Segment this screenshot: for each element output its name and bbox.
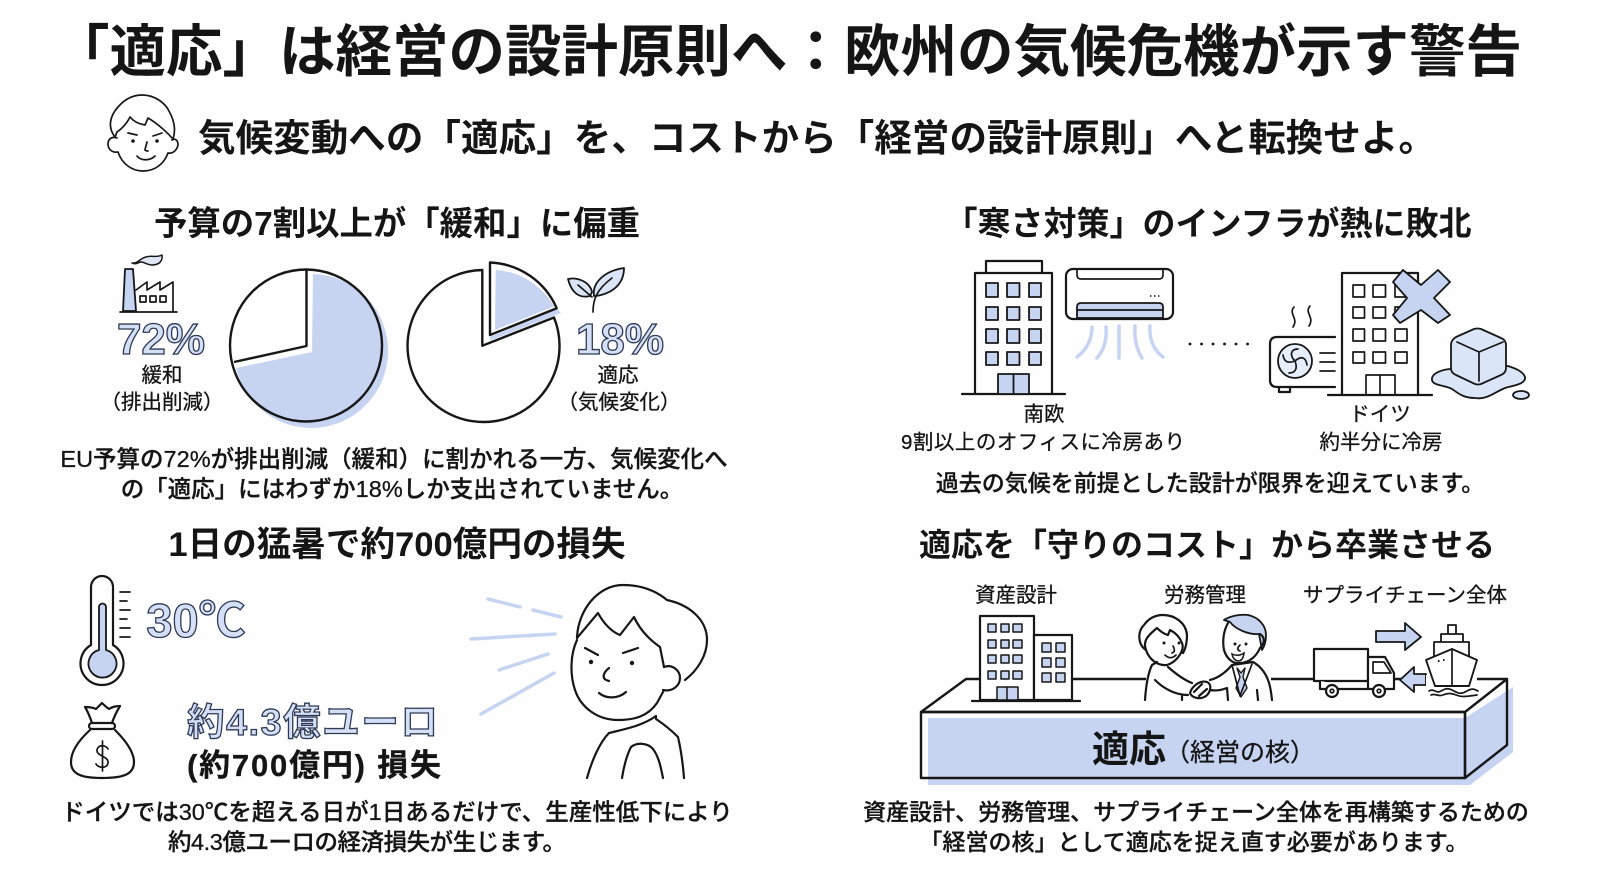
- label: asset design: 資産設計: [975, 584, 1057, 607]
- icon: person: [571, 585, 707, 778]
- icon: handshake people: [1139, 615, 1272, 702]
- title: 「適応」は経営の設計原則へ：欧州の気候危機が示す警告: [53, 20, 1522, 83]
- icon: air conditioner: [1066, 269, 1173, 358]
- icon: thermometer: [80, 576, 130, 685]
- panel: budget bias: [60, 205, 728, 502]
- heading: infrastructure: 「寒さ対策」のインフラが熱に敗北: [944, 205, 1472, 242]
- text: core body: 「経営の核」として適応を捉え直す必要があります。: [919, 829, 1469, 855]
- stat: 30 degrees: 30℃: [146, 594, 246, 647]
- text: infrastructure body: 過去の気候を前提とした設計が限界を迎えています。: [936, 470, 1484, 496]
- label: supply chain: サプライチェーン全体: [1303, 584, 1507, 607]
- text: heat body: [61, 799, 733, 855]
- stat: yen loss: (約700億円) 損失: [187, 748, 441, 783]
- icon: truck: [1314, 649, 1394, 697]
- icon: ship: [1426, 625, 1478, 696]
- text: budget body: [60, 446, 728, 502]
- icon: outdoor unit: [1270, 306, 1335, 392]
- heading: core: 適応を「守りのコスト」から卒業させる: [919, 527, 1495, 563]
- subtitle: 気候変動への「適応」を、コストから「経営の設計原則」へと転換せよ。: [198, 117, 1436, 159]
- icon: leaf: [568, 268, 624, 312]
- icon: office buildings: [972, 616, 1080, 701]
- text: core body: 資産設計、労務管理、サプライチェーン全体を再構築するための: [863, 799, 1529, 825]
- text: heat body: ドイツでは30℃を超える日が1日あるだけで、生産性低下により: [61, 799, 733, 825]
- icon: south europe building: [962, 261, 1065, 394]
- arrow: inbound: [1400, 667, 1426, 692]
- pie chart: 72 percent: [230, 270, 388, 428]
- label: core of management: （経営の核）: [1165, 739, 1315, 767]
- heading: heat loss: 1日の猛暑で約700億円の損失: [168, 526, 626, 564]
- heading: budget: 予算の7割以上が「緩和」に偏重: [154, 205, 640, 243]
- text: heat body: 約4.3億ユーロの経済損失が生じます。: [168, 829, 566, 855]
- label: adaptation: 適応: [598, 364, 638, 387]
- label: adaptation sub: （気候変化）: [558, 391, 680, 414]
- icon: cross mark: [1393, 270, 1450, 323]
- label: germany: [1320, 403, 1442, 454]
- label: south europe: 9割以上のオフィスに冷房あり: [901, 431, 1185, 454]
- icon: money bag: [71, 703, 134, 778]
- panel: cold infrastructure: [901, 205, 1529, 496]
- label: south europe: [901, 403, 1185, 454]
- stat: 18%: 18%: [576, 315, 664, 364]
- label: mitigation sub: （排出削減）: [100, 391, 224, 414]
- icon: germany building: [1328, 273, 1432, 395]
- pie chart: 18 percent: [408, 262, 561, 422]
- label: labor management: 労務管理: [1164, 584, 1246, 607]
- heat rays: [471, 599, 561, 714]
- panel: core of management: [863, 527, 1529, 855]
- stat: 72%: 72%: [117, 315, 205, 364]
- label: mitigation: 緩和: [142, 364, 182, 387]
- platform: adaptation core: [921, 679, 1513, 785]
- label: germany: ドイツ: [1349, 403, 1411, 426]
- dotted connector: [1190, 343, 1249, 345]
- panel: heat loss: [61, 526, 733, 855]
- icon: factory: [120, 255, 177, 312]
- text: core body: [863, 799, 1529, 855]
- text: budget body: の「適応」にはわずか18%しか支出されていません。: [121, 476, 683, 502]
- text: budget body: EU予算の72%が排出削減（緩和）に割かれる一方、気候変化へ: [60, 446, 728, 472]
- label: south europe: 南欧: [1024, 403, 1064, 426]
- arrow: outbound: [1376, 623, 1421, 650]
- stat: euro loss: 約4.3億ユーロ: [187, 701, 438, 743]
- label: germany: 約半分に冷房: [1320, 431, 1442, 454]
- label: adaptation big: 適応: [1092, 729, 1166, 770]
- icon: melting ice: [1432, 328, 1529, 399]
- icon: presenter face: [108, 95, 178, 171]
